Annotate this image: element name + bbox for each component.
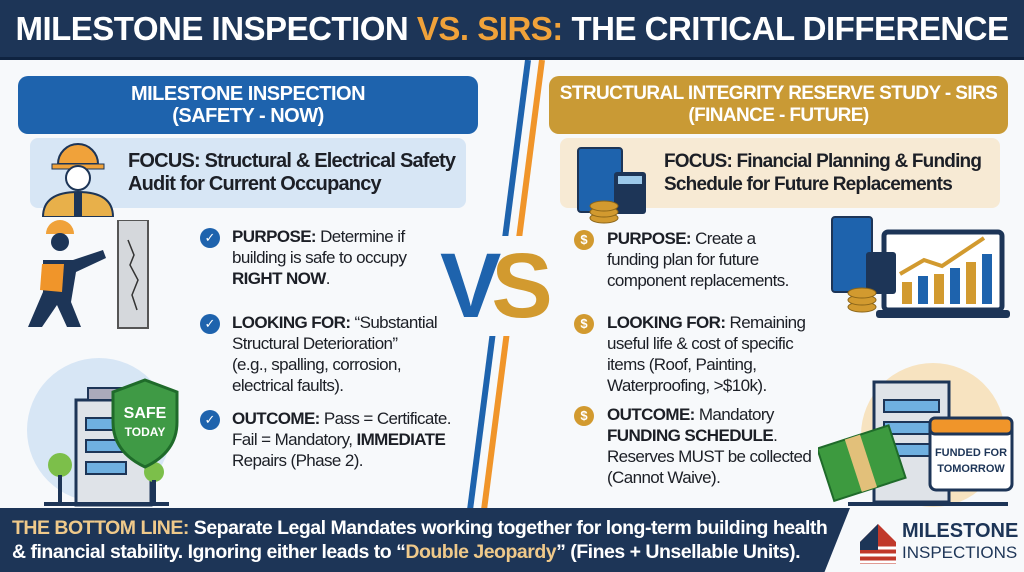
bullet: purpose: PURPOSE: Create a: [607, 229, 756, 248]
bullet: outcome: [574, 405, 811, 487]
left focus: Audit for Current Occupancy: [128, 173, 381, 195]
right focus: [560, 138, 1000, 208]
icon: building with money and calendar: TOMORROW: [937, 463, 1005, 475]
bottom line bar: & financial stability. Ignoring either leads to “Double Jeopardy” (Fines + Unsellable Units).: [12, 541, 800, 563]
icon: building with money and calendar: [818, 363, 1014, 507]
logo: [860, 520, 1018, 564]
bullet: outcome: $: [580, 408, 588, 423]
bullet: looking for: ✓: [205, 316, 215, 331]
bullet: looking for: [574, 313, 805, 395]
bullet: outcome: [200, 409, 451, 470]
bullet: outcome: ✓: [205, 412, 215, 427]
right header: (FINANCE - FUTURE): [688, 105, 869, 126]
VS: VS: [440, 235, 543, 337]
bullet: outcome: Fail = Mandatory, IMMEDIATE: [232, 430, 445, 449]
bullet: outcome: Repairs (Phase 2).: [232, 451, 363, 470]
bullet: purpose: PURPOSE: Determine if: [232, 227, 405, 246]
bullet: purpose: building is safe to occupy: [232, 248, 406, 267]
left header: MILESTONE INSPECTION: [131, 83, 365, 105]
bullet: purpose: [200, 227, 407, 288]
bottom line bar: THE BOTTOM LINE: Separate Legal Mandates working together for long-term building health: [12, 517, 827, 539]
bullet: looking for: [200, 313, 437, 395]
bullet: looking for: LOOKING FOR: “Substantial: [232, 313, 437, 332]
icon: binder laptop chart: [831, 216, 1010, 318]
bullet: looking for: LOOKING FOR: Remaining: [607, 313, 805, 332]
icon: building with shield: TODAY: [125, 425, 165, 439]
bottom line bar: [0, 508, 850, 572]
bullet: purpose: funding plan for future: [607, 250, 759, 269]
title bar: MILESTONE INSPECTION VS. SIRS: THE CRITICAL DIFFERENCE: [15, 10, 1009, 46]
bullet: purpose: RIGHT NOW.: [232, 269, 330, 288]
icon: building with money and calendar: FUNDED FOR: [935, 447, 1007, 459]
bullet: looking for: electrical faults).: [232, 376, 343, 395]
bullet: outcome: FUNDING SCHEDULE.: [607, 426, 777, 445]
right bullets: [574, 229, 811, 487]
bullet: outcome: OUTCOME: Mandatory: [607, 405, 774, 424]
bullet: purpose: ✓: [205, 230, 215, 245]
right focus: Schedule for Future Replacements: [664, 174, 952, 195]
icon: binder calculator coins: [577, 147, 646, 224]
bullet: looking for: items (Roof, Painting,: [607, 355, 756, 374]
right header: [549, 76, 1008, 134]
right header: STRUCTURAL INTEGRITY RESERVE STUDY - SIRS: [560, 83, 997, 104]
bullet: looking for: (e.g., spalling, corrosion,: [232, 355, 401, 374]
icon: inspector: [42, 143, 114, 217]
bullet: looking for: $: [580, 316, 588, 331]
bullet: looking for: useful life & cost of specific: [607, 334, 793, 353]
left focus: [30, 138, 466, 208]
icon: building with shield: SAFE: [124, 405, 167, 422]
left header: [18, 76, 478, 134]
icon: worker and cracked wall: [28, 220, 149, 329]
logo: INSPECTIONS: [902, 543, 1017, 562]
bullet: purpose: $: [580, 232, 588, 247]
bullet: outcome: Reserves MUST be collected: [607, 447, 811, 466]
icon: building with shield: [27, 358, 178, 506]
left focus: FOCUS: Structural & Electrical Safety: [128, 150, 455, 172]
bullet: purpose: [574, 229, 789, 290]
logo: MILESTONE: [902, 520, 1018, 542]
left header: (SAFETY - NOW): [172, 105, 324, 127]
title bar: [0, 0, 1024, 60]
left bullets: [200, 227, 451, 470]
bullet: looking for: Waterproofing, >$10k).: [607, 376, 767, 395]
right focus: FOCUS: Financial Planning & Funding: [664, 151, 981, 172]
bullet: looking for: Structural Deterioration”: [232, 334, 397, 353]
divider lines: [467, 60, 545, 508]
bullet: purpose: component replacements.: [607, 271, 789, 290]
bullet: outcome: OUTCOME: Pass = Certificate.: [232, 409, 451, 428]
bullet: outcome: (Cannot Waive).: [607, 468, 720, 487]
